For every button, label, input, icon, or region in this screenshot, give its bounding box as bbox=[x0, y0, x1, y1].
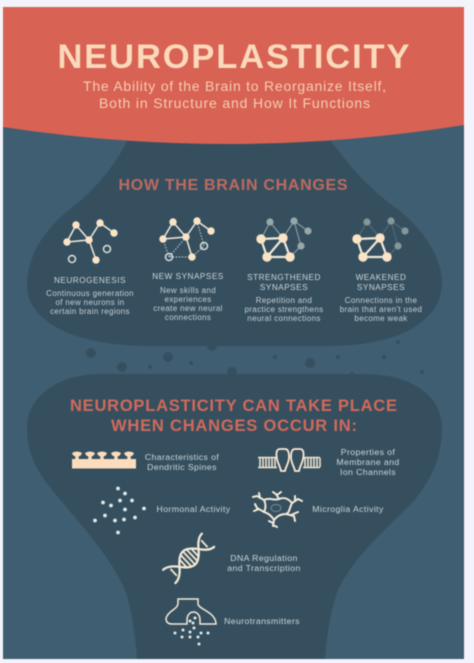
text: new synapses bbox=[152, 272, 224, 322]
icon: strengthened synapses network bbox=[256, 217, 312, 262]
text: dendritic spines: Dendritic Spines bbox=[147, 462, 217, 472]
text: neurogenesis: certain brain regions bbox=[50, 307, 130, 316]
heading: neuroplasticity can take place bbox=[70, 397, 397, 435]
text: DNA regulation: DNA Regulation bbox=[230, 553, 298, 563]
text: strengthened synapses: Repetition and bbox=[256, 296, 312, 305]
text: membrane and ion channels: Membrane and bbox=[336, 457, 400, 467]
text: neurogenesis: NEUROGENESIS bbox=[54, 276, 126, 285]
text: weakened synapses bbox=[340, 273, 422, 323]
panel: red header bbox=[3, 7, 464, 144]
subtitle bbox=[83, 78, 386, 111]
text: microglia activity: Microglia Activity bbox=[312, 504, 384, 514]
text: new synapses: New skills and bbox=[160, 286, 216, 295]
text: weakened synapses: SYNAPSES bbox=[357, 283, 405, 292]
text: strengthened synapses: neural connections bbox=[247, 314, 321, 323]
text: strengthened synapses: practice strengthens bbox=[244, 305, 324, 314]
text: strengthened synapses: STRENGTHENED bbox=[247, 273, 321, 282]
text: strengthened synapses: SYNAPSES bbox=[260, 283, 308, 292]
title: NEUROPLASTICITY bbox=[58, 38, 410, 76]
icon: membrane and ion channels bbox=[258, 449, 320, 471]
icon: dendritic spines bbox=[72, 452, 136, 468]
text: hormonal activity: Hormonal Activity bbox=[157, 504, 231, 514]
text: DNA regulation: and Transcription bbox=[227, 563, 301, 573]
neurotransmitter bubbles between shapes bbox=[86, 340, 424, 377]
heading: neuroplasticity can take place: WHEN CHANGES OCCUR IN: bbox=[111, 417, 357, 435]
panel: how the brain changes shape bbox=[27, 141, 442, 346]
heading: how the brain changes: HOW THE BRAIN CHANGES bbox=[118, 177, 348, 194]
text: new synapses: NEW SYNAPSES bbox=[152, 272, 224, 281]
text: weakened synapses: become weak bbox=[354, 314, 408, 323]
icon: hormone droplets bbox=[93, 487, 146, 534]
icon: neurogenesis network bbox=[63, 219, 118, 264]
text: neurogenesis: Continuous generation bbox=[46, 289, 134, 298]
text: weakened synapses: Connections in the bbox=[345, 296, 417, 305]
icon: new synapses network bbox=[159, 217, 215, 261]
panel: changes occur shape bbox=[27, 374, 442, 659]
text: neurogenesis: of new neurons in bbox=[55, 298, 125, 307]
icon: weakened synapses network bbox=[352, 217, 409, 262]
text: dendritic spines: Characteristics of bbox=[145, 452, 219, 462]
text: DNA regulation bbox=[227, 553, 301, 573]
text: neurogenesis bbox=[46, 276, 134, 316]
text: dendritic spines bbox=[145, 452, 219, 472]
text: membrane and ion channels: Properties of bbox=[341, 447, 395, 457]
text: new synapses: connections bbox=[165, 313, 211, 322]
text: new synapses: create new neural bbox=[153, 304, 223, 313]
icon: neurotransmitter terminal bbox=[166, 599, 216, 646]
text: membrane and ion channels bbox=[336, 447, 400, 477]
text: weakened synapses: WEAKENED bbox=[356, 273, 406, 282]
subtitle: Both in Structure and How It Functions bbox=[99, 95, 370, 111]
text: weakened synapses: brain that aren't used bbox=[340, 305, 422, 314]
icon: microglia cell bbox=[253, 492, 302, 527]
text: strengthened synapses bbox=[244, 273, 324, 323]
heading: neuroplasticity can take place: NEUROPLASTICITY CAN TAKE PLACE bbox=[70, 397, 397, 415]
text: new synapses: experiences bbox=[164, 295, 212, 304]
text: neurotransmitters: Neurotransmitters bbox=[224, 616, 300, 626]
subtitle: The Ability of the Brain to Reorganize Itself, bbox=[83, 78, 386, 94]
text: membrane and ion channels: Ion Channels bbox=[340, 467, 396, 477]
icon: DNA helix bbox=[163, 534, 214, 583]
